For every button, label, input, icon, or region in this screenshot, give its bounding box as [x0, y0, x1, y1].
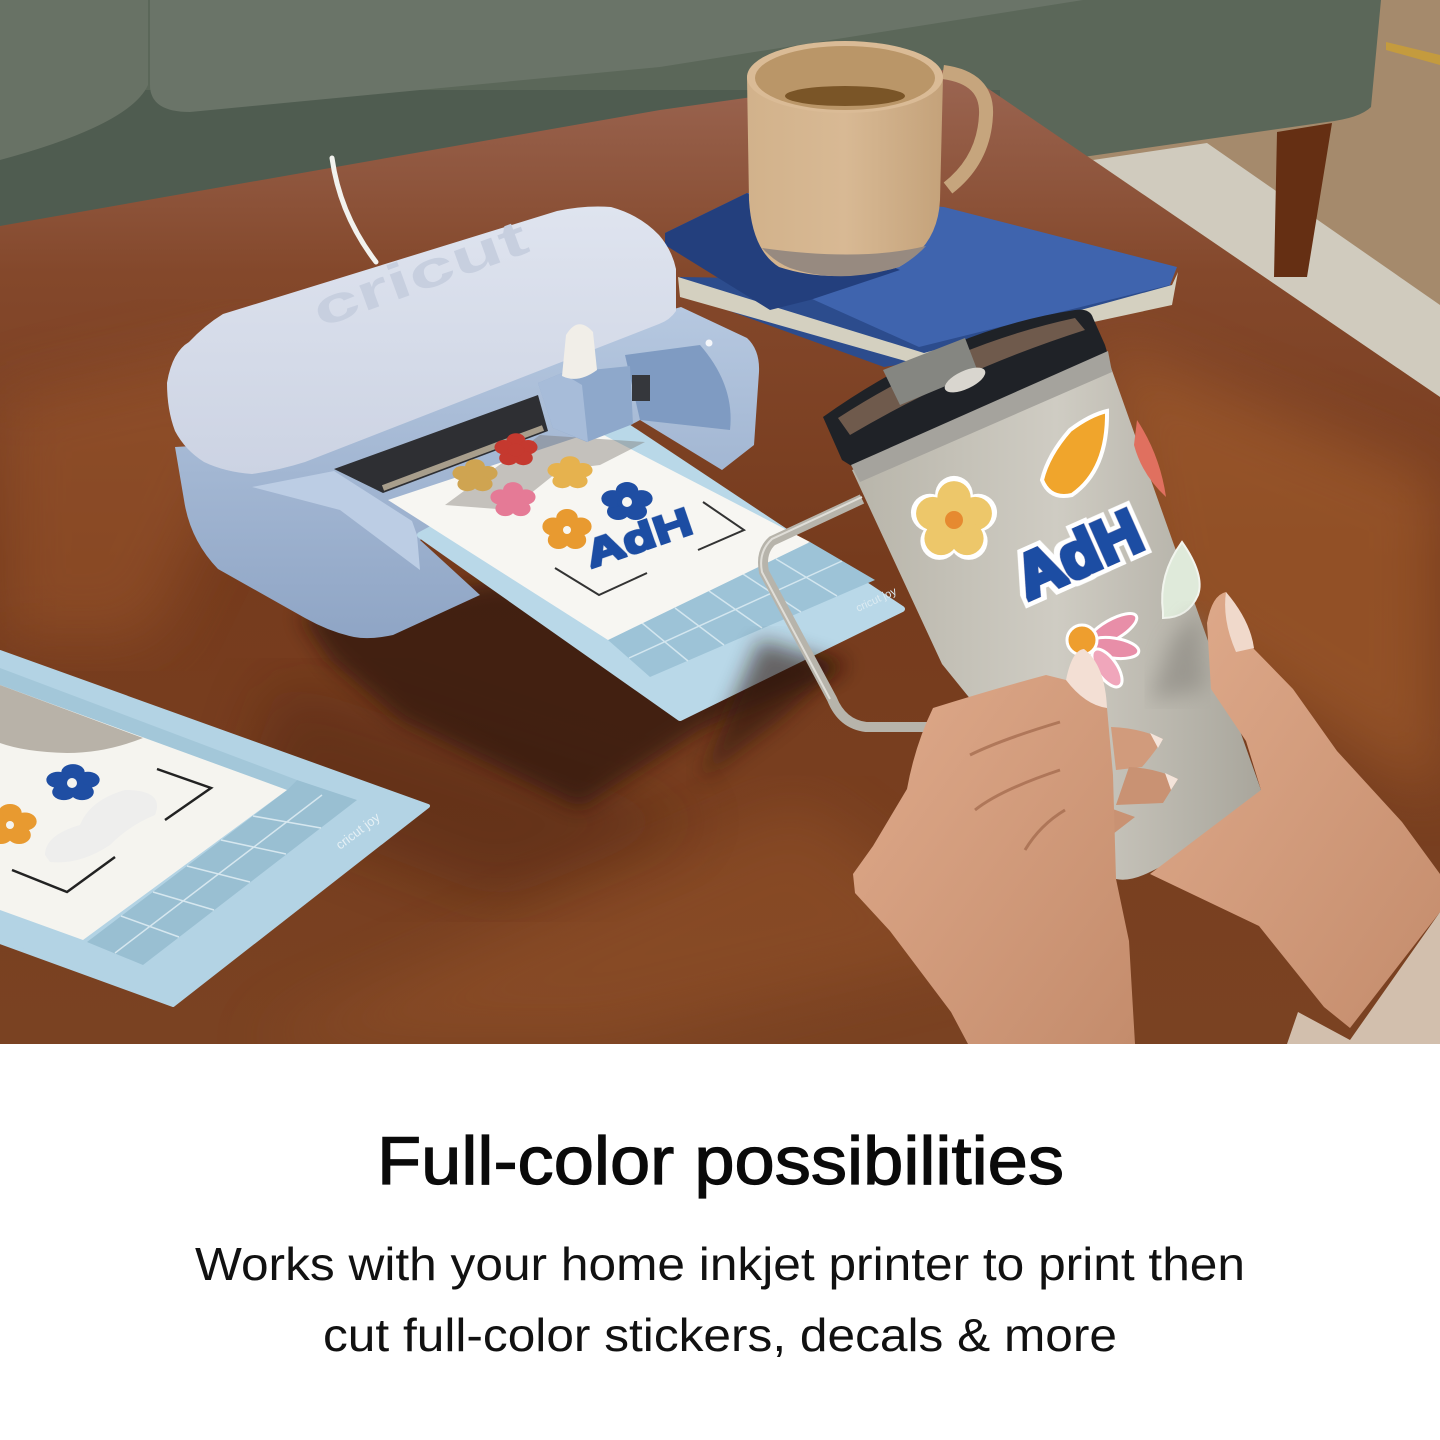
printer right cavity — [625, 345, 731, 430]
sticker sheet — [388, 431, 810, 640]
tumbler body — [852, 362, 1261, 880]
caption panel — [0, 1044, 1440, 1440]
left thumb nail — [1066, 649, 1107, 708]
power cable — [332, 158, 376, 262]
sticker: pink flower — [1067, 607, 1141, 692]
mat grid — [608, 542, 875, 677]
body text — [195, 1238, 1245, 1361]
sticker: yellow flower — [911, 476, 997, 560]
pages — [678, 272, 1178, 362]
lid logo: cricut — [305, 209, 536, 338]
printer carriage — [538, 324, 633, 442]
printer lid — [167, 206, 676, 474]
sticker: AdH: AdH — [1006, 497, 1152, 613]
thumb shadow on tumbler — [1150, 610, 1205, 700]
tumbler stickers — [911, 411, 1200, 692]
mat brand: cricut joy — [333, 809, 383, 852]
cutting mat in printer — [388, 425, 902, 718]
back cover — [680, 277, 1172, 367]
sheet crop marks — [555, 502, 744, 595]
mat grid — [0, 668, 357, 965]
printer — [167, 206, 759, 638]
body text: cut full-color stickers, decals & more — [323, 1309, 1117, 1361]
body text: Works with your home inkjet printer to print then — [195, 1238, 1245, 1290]
left hand back fingers — [1110, 727, 1178, 834]
heading: Full-color possibilities — [377, 1123, 1064, 1199]
notebook — [665, 193, 1178, 367]
finger creases — [970, 722, 1065, 850]
front cover — [665, 193, 1177, 347]
table wood sheen — [0, 330, 1440, 1044]
shadow under printer and mat — [300, 580, 850, 808]
sticker: red flower — [1134, 420, 1166, 497]
coffee mug — [747, 41, 986, 276]
tumbler lid — [823, 310, 1110, 470]
roller slot — [334, 395, 548, 493]
right thumb nail — [1225, 592, 1254, 652]
sofa — [0, 0, 1381, 277]
printer body — [175, 307, 759, 638]
sheet stickers — [452, 433, 698, 577]
tumbler — [761, 310, 1261, 880]
second cutting mat — [0, 652, 428, 1005]
printer front block — [252, 471, 420, 570]
sticker: green leaf — [1162, 542, 1200, 618]
tumbler handle shadow — [700, 640, 840, 780]
right hand — [1150, 592, 1440, 1028]
hands — [853, 592, 1440, 1044]
sheet stickers: AdH — [580, 501, 698, 577]
mat sheet — [0, 685, 287, 940]
shadow on sheet — [445, 435, 645, 510]
tumbler handle — [763, 499, 930, 727]
mat brand: cricut joy — [854, 585, 899, 615]
left hand — [853, 649, 1135, 1044]
sweater cuff — [1287, 912, 1440, 1044]
power LED — [706, 340, 712, 346]
sticker: mango — [1042, 411, 1107, 496]
rail end — [632, 375, 650, 401]
background: room floor and rug — [0, 0, 1440, 420]
mat stickers — [0, 764, 211, 892]
wooden table — [0, 68, 1440, 1044]
photo: printer, mug and hands on a wooden table — [0, 0, 1440, 1044]
